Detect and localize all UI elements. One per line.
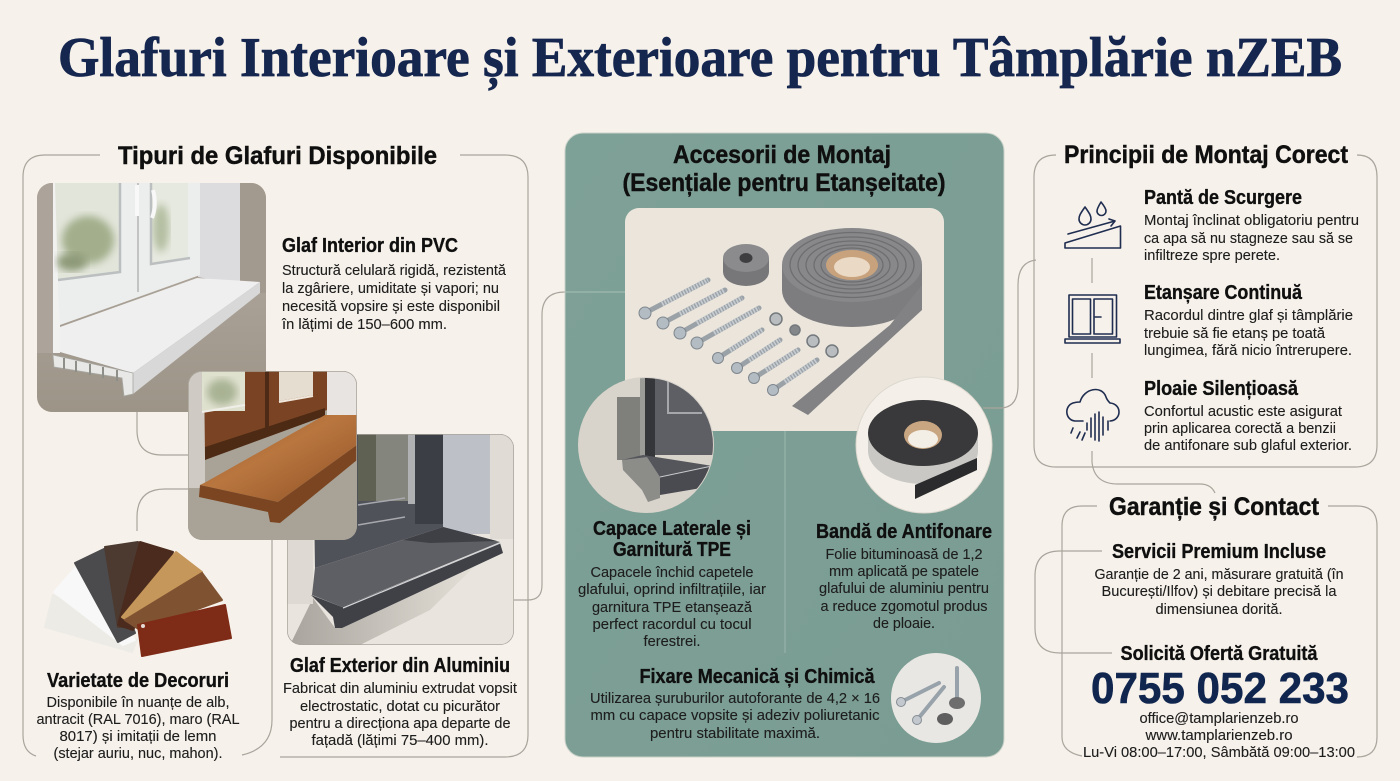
photo: wood-look sill [188, 371, 357, 540]
text: premium services [1094, 541, 1344, 618]
text: decor variety: 8017) și imitații de lemn [60, 728, 216, 745]
phone number: 0755 052 233 [1091, 664, 1349, 713]
text: decor variety [36, 670, 240, 762]
text: interior PVC sill: necesită vopsire și este disponibil [282, 298, 500, 315]
text: antiphon tape: de ploaie. [873, 615, 935, 632]
icon: rain cloud with sound wave [1067, 390, 1119, 441]
photo: exterior aluminium sill [287, 434, 514, 645]
text: antiphon tape: glafului de aluminiu pentru [819, 580, 989, 597]
icon: decor swatch fan [45, 542, 231, 656]
panel: mounting accessories [565, 133, 1004, 757]
connector: principles to contact [1092, 451, 1215, 493]
panel outline [1062, 506, 1377, 757]
heading: types: Tipuri de Glafuri Disponibile [118, 142, 437, 170]
photo: screws circle [891, 653, 981, 743]
connector: services to offer [1035, 551, 1112, 653]
text: contact details: Lu-Vi 08:00–17:00, Sâmbătă 09:00–13:00 [1083, 744, 1355, 761]
text: side caps and TPE gasket: perfect racordul cu tocul [592, 616, 752, 633]
text: side caps and TPE gasket: Capace Laterale și [593, 518, 751, 540]
text: exterior aluminium sill: pentru a direcționa apa departe de [290, 715, 510, 732]
text: mechanical and chemical fixing [590, 666, 880, 742]
text: exterior aluminium sill [283, 655, 518, 749]
photo: interior PVC sill [37, 183, 266, 412]
text: silent rain: prin aplicarea corectă a benzii [1144, 420, 1336, 437]
panel background [565, 133, 1004, 757]
text: exterior aluminium sill: Glaf Exterior din Aluminiu [290, 655, 510, 677]
text: drainage slope: ca apa să nu stagneze sau să se [1144, 230, 1353, 247]
text: interior PVC sill: Glaf Interior din PVC [282, 235, 458, 257]
text: drainage slope [1144, 187, 1359, 264]
text: premium services: Servicii Premium Incluse [1112, 541, 1326, 563]
connector: left panel to accessories [514, 292, 625, 600]
text: antiphon tape [816, 521, 992, 632]
text: premium services: București/Ilfov) și debitare precisă la [1102, 583, 1337, 600]
title: Glafuri Interioare și Exterioare pentru Tâmplărie nZEB [58, 27, 1342, 91]
text: drainage slope: infiltreze spre perete. [1144, 247, 1280, 264]
text: side caps and TPE gasket: Capacele închid capetele [590, 564, 754, 581]
panel: types of window sills [23, 142, 528, 762]
panel outline [1034, 155, 1377, 467]
text: exterior aluminium sill: fațadă (lățimi 75–400 mm). [312, 732, 488, 749]
text: antiphon tape: a reduce zgomotul produs [820, 598, 988, 615]
icon: window with sill [1065, 295, 1120, 343]
text: decor variety: (stejar auriu, nuc, mahon). [54, 745, 222, 762]
text: continuous sealing: Etanșare Continuă [1144, 282, 1303, 304]
text: silent rain: Ploaie Silențioasă [1144, 378, 1299, 400]
panel: correct installation principles [1034, 141, 1377, 467]
text: contact details: www.tamplarienzeb.ro [1145, 727, 1292, 744]
heading: accessories: Accesorii de Montaj [673, 141, 891, 169]
text: mechanical and chemical fixing: Fixare Mecanică și Chimică [640, 666, 875, 688]
text: side caps and TPE gasket [578, 518, 766, 650]
text: contact details: Solicită Ofertă Gratuită [1120, 643, 1318, 665]
text: silent rain [1144, 378, 1352, 454]
text: continuous sealing: trebuie să fie etanș pe toată [1144, 325, 1326, 342]
heading: warranty and contact: Garanție și Contact [1109, 493, 1320, 521]
text: side caps and TPE gasket: glafului, oprind infiltrațiile, iar [578, 581, 766, 598]
panel outline [23, 155, 528, 757]
text: silent rain: de antifonare sub glaful exterior. [1144, 437, 1352, 454]
text: mechanical and chemical fixing: Utilizarea șuruburilor autoforante de 4,2 × 16 [590, 690, 880, 707]
text: continuous sealing: Racordul dintre glaf și tâmplărie [1144, 307, 1353, 324]
text: side caps and TPE gasket: ferestrei. [644, 633, 700, 650]
text: premium services: dimensiunea dorită. [1156, 601, 1282, 618]
photo: screws, washer and tape roll [625, 208, 944, 431]
text: antiphon tape: mm aplicată pe spatele [829, 563, 979, 580]
text: contact details [1083, 643, 1355, 761]
text: continuous sealing: lungimea, fără nicio întrerupere. [1144, 342, 1352, 359]
text: interior PVC sill [281, 235, 507, 333]
text: drainage slope: Pantă de Scurgere [1144, 187, 1302, 209]
text: drainage slope: Montaj înclinat obligatoriu pentru [1144, 212, 1359, 229]
text: decor variety: antracit (RAL 7016), maro (RAL [36, 711, 240, 728]
text: side caps and TPE gasket: Garnitură TPE [613, 539, 731, 561]
text: antiphon tape: Bandă de Antifonare [816, 521, 992, 543]
text: exterior aluminium sill: electrostatic, dotat cu picurător [300, 698, 500, 715]
heading: accessories: (Esențiale pentru Etanșeitate) [622, 169, 946, 197]
text: silent rain: Confortul acustic este asigurat [1144, 403, 1343, 420]
text: interior PVC sill: în lățimi de 150–600 mm. [281, 316, 447, 333]
panel: warranty and contact [1035, 493, 1377, 761]
icon: slope with water drops [1065, 202, 1120, 248]
connectors between photos [137, 412, 188, 531]
text: premium services: Garanție de 2 ani, măsurare gratuită (în [1094, 566, 1344, 583]
heading: accessories [622, 141, 946, 197]
text: mechanical and chemical fixing: pentru stabilitate maximă. [650, 725, 820, 742]
photo: antiphon tape circle [856, 377, 992, 513]
text: side caps and TPE gasket: garnitura TPE etanșează [592, 599, 753, 616]
text: mechanical and chemical fixing: mm cu capace vopsite și adeziv poliuretanic [590, 707, 880, 724]
heading: principles: Principii de Montaj Corect [1064, 141, 1349, 169]
text: decor variety: Varietate de Decoruri [47, 670, 229, 692]
text: decor variety: Disponibile în nuanțe de alb, [46, 694, 230, 711]
text: interior PVC sill: Structură celulară rigidă, rezistentă [282, 262, 507, 279]
connector: accessories to principles [983, 260, 1036, 408]
text: interior PVC sill: la zgâriere, umiditate și vapori; nu [282, 280, 499, 297]
text: continuous sealing [1144, 282, 1353, 359]
text: contact details: office@tamplarienzeb.ro [1140, 710, 1298, 727]
text: exterior aluminium sill: Fabricat din aluminiu extrudat vopsit [283, 680, 518, 697]
photo: side cap circle [578, 377, 715, 513]
text: antiphon tape: Folie bituminoasă de 1,2 [826, 546, 982, 563]
